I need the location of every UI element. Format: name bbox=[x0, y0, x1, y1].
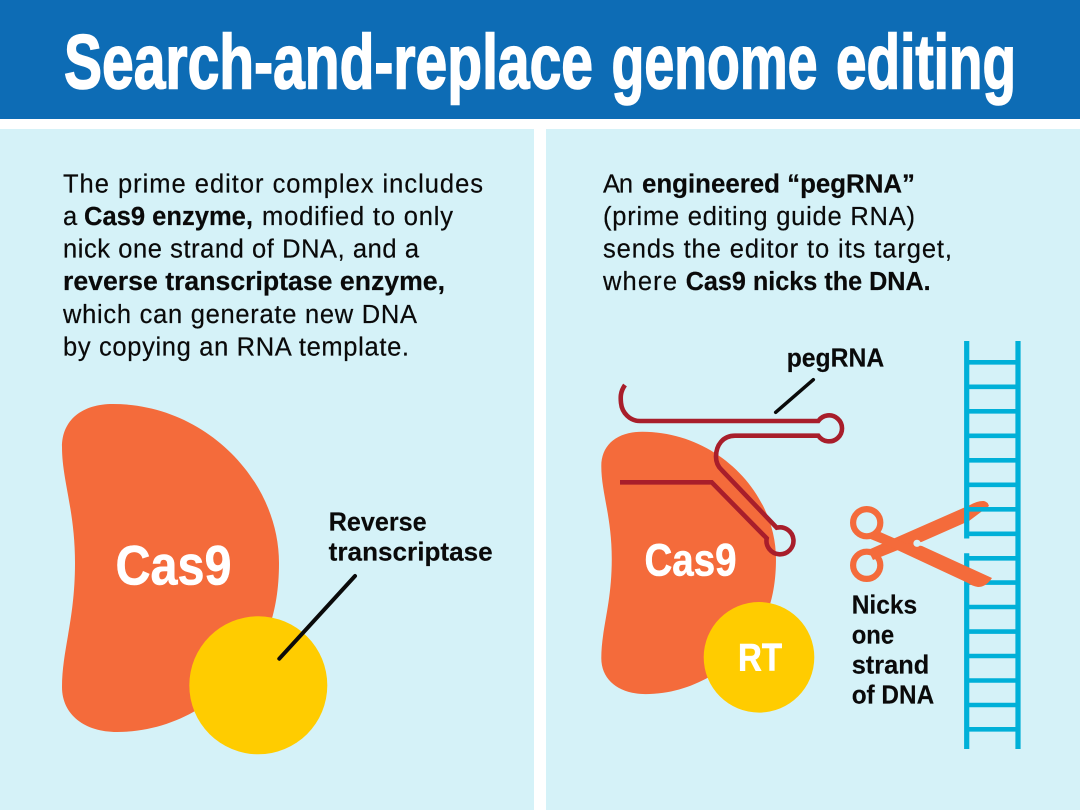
nick label bbox=[852, 589, 934, 709]
text block: pegRNA description: (prime editing guide RNA) bbox=[603, 203, 915, 231]
reverse transcriptase label: Reverse bbox=[329, 507, 427, 537]
panel: pegRNA targeting bbox=[546, 129, 1080, 810]
text block: complex description: which can generate new DNA bbox=[62, 301, 417, 329]
nick label: one bbox=[852, 619, 894, 649]
panel: prime editor complex bbox=[0, 129, 534, 810]
title: genome bbox=[612, 20, 818, 106]
RT label: RT bbox=[738, 636, 782, 680]
text block: complex description: Cas9 enzyme, bbox=[84, 203, 253, 231]
scissors upper blade bbox=[868, 501, 989, 560]
pegRNA leader line bbox=[776, 380, 813, 412]
text block: pegRNA description bbox=[602, 170, 952, 296]
text block: complex description: nick one strand of DNA, and a bbox=[63, 236, 420, 264]
reverse transcriptase label: transcriptase bbox=[329, 537, 493, 567]
RT circle bbox=[704, 602, 814, 713]
nick label: strand bbox=[852, 649, 929, 679]
text block: complex description: a bbox=[63, 203, 78, 231]
nick label: Nicks bbox=[852, 589, 917, 619]
text block: complex description bbox=[62, 170, 483, 362]
text block: complex description: reverse transcriptase enzyme, bbox=[63, 268, 445, 296]
text block: pegRNA description: An bbox=[603, 170, 633, 198]
text block: complex description: The prime editor complex includes bbox=[63, 170, 483, 198]
reverse transcriptase circle bbox=[189, 616, 327, 754]
scissors lower blade and handles bbox=[853, 509, 992, 587]
text block: pegRNA description: engineered “pegRNA” bbox=[642, 170, 915, 198]
pegRNA label: pegRNA bbox=[787, 343, 884, 373]
Cas9 label: Cas9 bbox=[644, 534, 736, 586]
title: Search-and-replace bbox=[64, 20, 593, 106]
Cas9 label: Cas9 bbox=[116, 534, 232, 596]
text block: pegRNA description: Cas9 nicks the DNA. bbox=[686, 268, 931, 296]
reverse transcriptase label bbox=[329, 507, 493, 567]
Cas9 enzyme shape bbox=[62, 404, 279, 732]
text block: complex description: modified to only bbox=[262, 203, 453, 231]
nick label: of DNA bbox=[852, 679, 934, 709]
header band bbox=[0, 0, 1080, 119]
text block: pegRNA description: sends the editor to its target, bbox=[603, 236, 952, 264]
text block: pegRNA description: where bbox=[602, 268, 677, 296]
DNA ladder bbox=[966, 341, 1018, 749]
pegRNA strand bbox=[620, 385, 842, 554]
Cas9 enzyme shape bbox=[601, 432, 776, 694]
text block: complex description: by copying an RNA template. bbox=[63, 334, 409, 362]
leader line bbox=[279, 576, 355, 659]
